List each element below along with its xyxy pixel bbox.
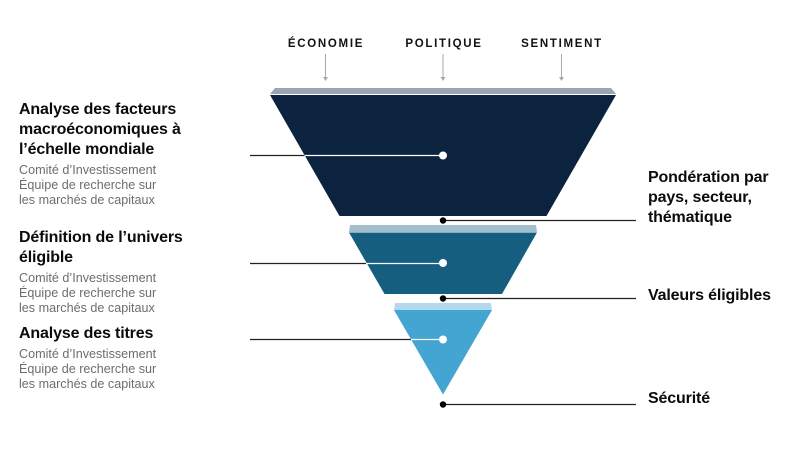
text: équipes univers	[19, 271, 156, 315]
text: équipes titres: Équipe de recherche sur	[19, 362, 156, 376]
text: équipes macro: Comité d’Investissement	[19, 163, 156, 177]
text: équipes univers: les marchés de capitaux	[19, 301, 155, 315]
text: équipes univers: Comité d’Investissement	[19, 271, 156, 285]
arrow: politique	[440, 54, 446, 81]
text: équipes macro: Équipe de recherche sur	[19, 178, 156, 192]
text: équipes macro	[19, 163, 156, 207]
heading: analyse macro	[19, 101, 181, 158]
funnel tier 1: navy	[270, 88, 616, 216]
heading: analyse macro: macroéconomiques à	[19, 121, 181, 138]
text: équipes titres	[19, 347, 156, 391]
column label: politique: POLITIQUE	[405, 38, 483, 50]
column label: économie: ÉCONOMIE	[288, 38, 364, 50]
arrow: sentiment	[559, 54, 564, 81]
leader line: univers éligible	[250, 259, 447, 267]
leader line: sécurité	[440, 401, 636, 408]
heading: analyse des titres: Analyse des titres	[19, 325, 153, 342]
label: sécurité: Sécurité	[648, 390, 710, 407]
funnel tier 2: teal	[349, 225, 537, 294]
label: pondération	[648, 169, 768, 226]
text: équipes titres: Comité d’Investissement	[19, 347, 156, 361]
heading: univers éligible	[19, 229, 183, 266]
leader line: analyse des titres	[250, 336, 447, 344]
heading: analyse macro: l’échelle mondiale	[19, 141, 154, 158]
leader line: valeurs éligibles	[440, 295, 636, 302]
heading: univers éligible: Définition de l’univers	[19, 229, 183, 246]
label: pondération: pays, secteur,	[648, 189, 752, 206]
arrow: économie	[323, 54, 328, 81]
heading: univers éligible: éligible	[19, 249, 73, 266]
text: équipes univers: Équipe de recherche sur	[19, 286, 156, 300]
heading: analyse macro: Analyse des facteurs	[19, 101, 176, 118]
leader line: pondération	[440, 217, 636, 224]
label: pondération: Pondération par	[648, 169, 768, 186]
funnel tier 3: light blue	[394, 303, 492, 394]
column label: sentiment: SENTIMENT	[521, 38, 603, 50]
label: valeurs éligibles: Valeurs éligibles	[648, 287, 771, 304]
text: équipes titres: les marchés de capitaux	[19, 377, 155, 391]
label: pondération: thématique	[648, 209, 732, 226]
text: équipes macro: les marchés de capitaux	[19, 193, 155, 207]
leader line: analyse macro	[250, 152, 447, 160]
